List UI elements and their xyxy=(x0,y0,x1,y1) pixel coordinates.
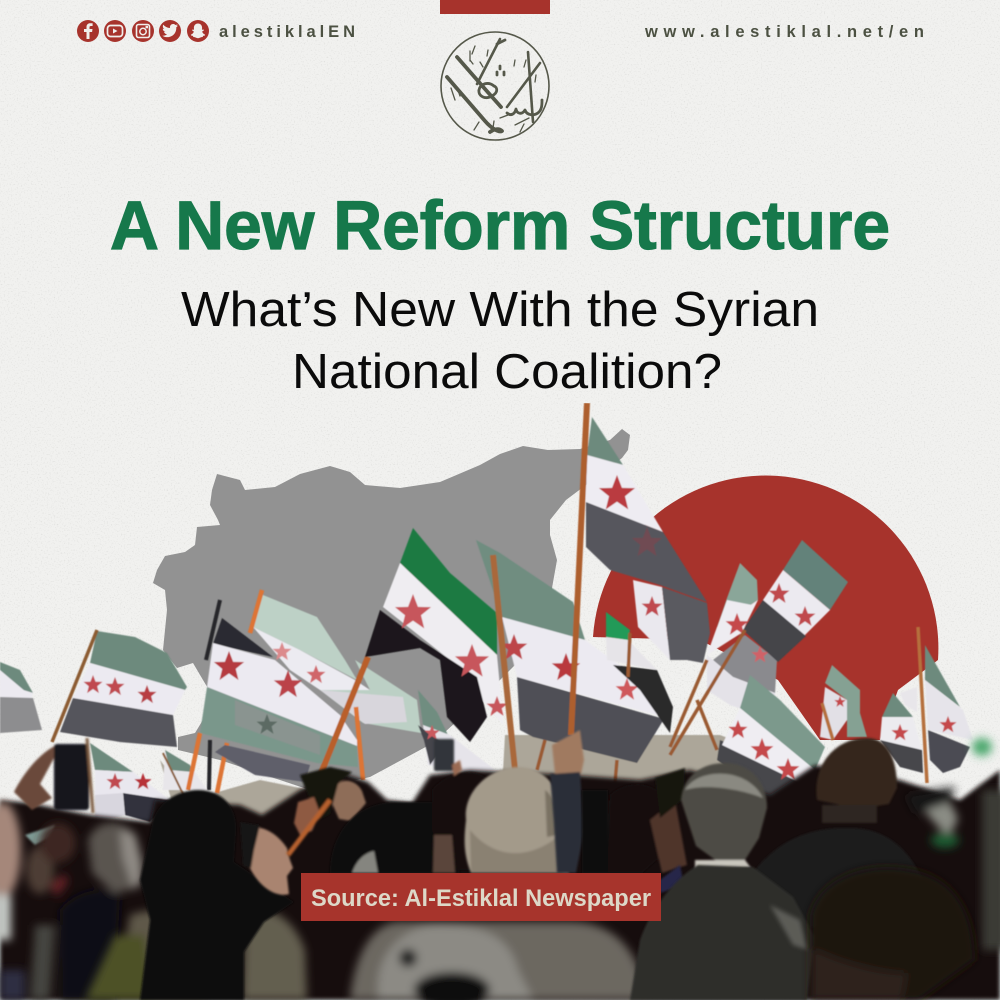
pole: dark flag staff xyxy=(206,600,220,790)
man in black head wrap xyxy=(140,790,294,1000)
flag: far right tall xyxy=(925,645,973,773)
pole: big centre xyxy=(493,555,515,770)
icon: youtube xyxy=(104,20,126,42)
flag: small back center xyxy=(606,612,673,733)
flag: back white fold xyxy=(633,580,710,663)
pole: small back lower left xyxy=(163,753,185,798)
flag: far left xyxy=(0,662,42,733)
men right of hood xyxy=(582,768,687,873)
flag: second left waving xyxy=(60,631,187,747)
olive and beige coats xyxy=(85,910,648,1000)
crowd photo xyxy=(0,730,1000,1000)
red circle xyxy=(593,476,938,740)
flag: small back lower left xyxy=(163,750,207,790)
cap wearer xyxy=(755,738,930,928)
pole: second left xyxy=(52,630,97,742)
flags photo xyxy=(0,403,973,855)
leather jacket xyxy=(630,865,815,1000)
flag: center background xyxy=(418,690,495,772)
icon: twitter xyxy=(159,20,181,42)
person in beige hood xyxy=(465,767,569,873)
foreground blurred head xyxy=(810,867,975,1000)
title: A New Reform Structure xyxy=(110,187,890,264)
man behind, left centre xyxy=(288,767,366,855)
raised hand with phone, left xyxy=(14,738,93,845)
social handle: alestiklalEN xyxy=(219,23,355,41)
flag: large green xyxy=(365,528,507,742)
far right blurred edge xyxy=(905,738,1000,950)
top red bar xyxy=(440,0,550,14)
poles: right xyxy=(537,630,745,783)
subtitle xyxy=(181,283,819,399)
subtitle: National Coalition? xyxy=(292,345,722,399)
website url: www.alestiklal.net/en xyxy=(644,23,924,41)
icon: facebook xyxy=(77,20,99,42)
flag: small right group xyxy=(820,665,867,740)
flag: big centre xyxy=(476,540,664,763)
icon: instagram xyxy=(132,20,154,42)
flag: pale background left xyxy=(253,595,421,733)
flag: large left inverted xyxy=(200,618,358,782)
pole: tall xyxy=(571,403,587,735)
flag: lower right large xyxy=(717,675,825,815)
jacket highlight xyxy=(770,905,808,950)
map of Syria silhouette xyxy=(153,429,630,790)
flag: small lower left xyxy=(90,743,170,822)
pole: far right xyxy=(822,627,927,783)
source label: Source: Al-Estiklal Newspaper xyxy=(311,885,651,912)
grey haired man xyxy=(660,763,767,893)
pole: center front xyxy=(288,657,368,855)
flag: far right small xyxy=(880,687,923,773)
left blurred people xyxy=(0,802,144,1000)
flag: tall xyxy=(586,417,707,602)
man profile xyxy=(240,822,293,895)
icon: snapchat xyxy=(187,20,209,42)
icon: Al-Estiklal calligraphic seal logo xyxy=(441,32,549,140)
heads and hoodies behind xyxy=(330,739,492,873)
hand raised holding pole xyxy=(550,730,584,873)
scenery behind flags xyxy=(160,735,825,830)
poles: orange back xyxy=(188,590,363,793)
social icons row xyxy=(77,20,209,42)
flag: right pale xyxy=(707,563,777,720)
source label xyxy=(301,873,661,921)
crowd dark mass xyxy=(0,765,1000,1000)
subtitle: What’s New With the Syrian xyxy=(181,283,819,337)
flag: right on stick xyxy=(743,540,848,662)
